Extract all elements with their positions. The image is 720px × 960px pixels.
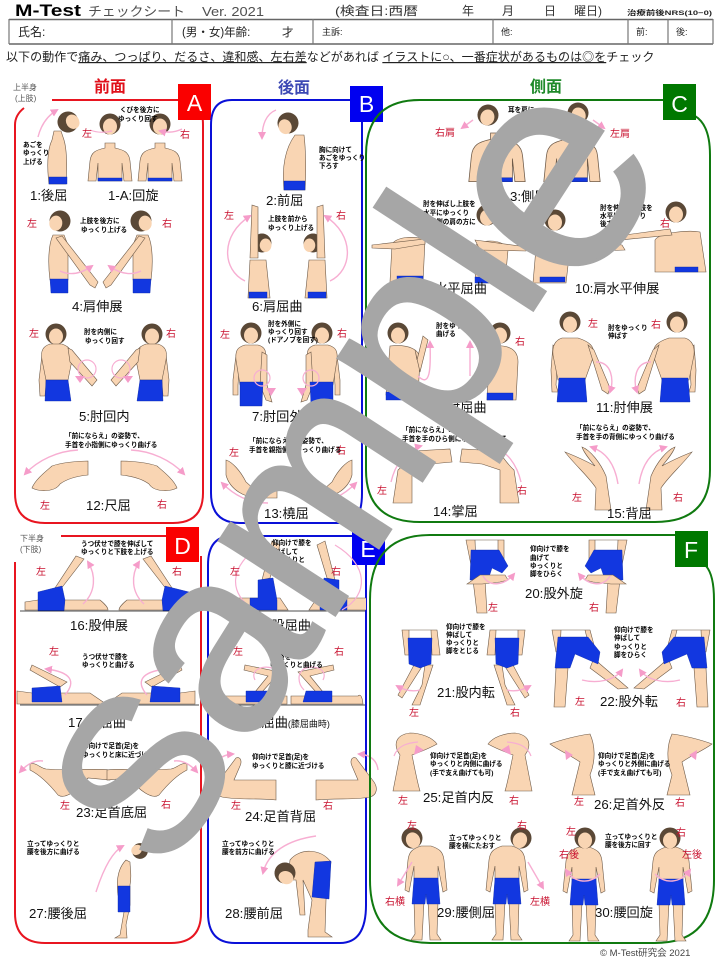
badge F — [675, 531, 708, 567]
exercise 23: 23:足首底屈 — [76, 805, 147, 820]
exercise 21: 左 — [409, 706, 419, 719]
exercise 10: 水平にゆっくり — [600, 211, 646, 220]
exercise 6 — [224, 205, 347, 314]
exercise 10: 肘を伸ばし上肢を — [600, 203, 653, 212]
exercise 1: 上げる — [23, 157, 43, 166]
exercise 14: 左 — [377, 484, 387, 497]
exercise 7 — [220, 319, 347, 424]
heading: front: 前面 — [94, 77, 126, 96]
exercise 13: 手首を親指側にゆっくり曲げる — [249, 445, 341, 454]
exercise 10: 後方に引く — [600, 219, 633, 228]
exercise 1: 1:後屈 — [30, 188, 67, 203]
exercise 26 — [550, 734, 712, 812]
exercise 1-A: 右 — [180, 128, 190, 141]
exercise 5: 肘を内側に — [84, 327, 117, 336]
exercise 12: 手首を小指側にゆっくり曲げる — [65, 440, 157, 449]
exercise 21 — [397, 622, 530, 719]
exercise 9: 水平にゆっくり — [423, 208, 469, 217]
exercise 30 — [559, 825, 702, 941]
exercise 18: ゆっくりと — [272, 555, 305, 564]
exercise 7: (ドアノブを回す) — [268, 335, 318, 344]
exercise 25: 右 — [509, 794, 519, 807]
frame F — [370, 535, 714, 943]
exercise 19: 19:股屈曲(膝屈曲時) — [230, 715, 330, 730]
section label: lower body — [20, 533, 44, 554]
exercise 22: 左 — [575, 695, 585, 708]
exercise 29: 左横 — [530, 895, 550, 908]
exercise 21: 右 — [510, 706, 520, 719]
section label: upper body — [13, 82, 37, 103]
exercise 11: 伸ばす — [608, 331, 628, 340]
exercise 15: 左 — [572, 491, 582, 504]
exercise 6: 右 — [336, 209, 346, 222]
exercise 20 — [466, 540, 627, 614]
panel D — [15, 527, 202, 943]
exercise 7: 肘を外側に — [268, 319, 301, 328]
exercise 22 — [552, 625, 710, 709]
patient table: 才 — [282, 25, 294, 39]
exercise 17 — [17, 645, 199, 730]
exercise 21: ゆっくりと — [446, 638, 479, 647]
exercise 17: 17:膝屈曲 — [68, 715, 126, 730]
exercise 23: 右 — [161, 798, 171, 811]
exercise 5: ゆっくり回す — [85, 336, 125, 345]
exercise 27 — [27, 839, 151, 938]
exercise 10 — [533, 202, 706, 296]
exercise 28: 腰を前方に曲げる — [222, 847, 275, 856]
panel C — [366, 84, 710, 522]
exercise 24: 24:足首背屈 — [245, 809, 316, 824]
title: チェックシート — [88, 4, 185, 19]
exercise 8: 右 — [515, 335, 525, 348]
exercise 24: ゆっくりと膝に近づける — [252, 761, 325, 770]
exercise 25: ゆっくりと内側に曲げる — [430, 759, 503, 768]
exercise 3: 3:側屈 — [510, 189, 547, 204]
badge D: D — [174, 533, 191, 559]
exam date: (検査日:西暦 — [335, 4, 418, 18]
exercise 23 — [20, 741, 197, 820]
exercise 12: 右 — [157, 498, 167, 511]
exercise 22: 伸ばして — [614, 633, 640, 642]
exercise 13: 「前にならえ」の姿勢で、 — [249, 436, 328, 445]
exercise 26: 左 — [574, 795, 584, 808]
exercise 28: 28:腰前屈 — [225, 905, 283, 921]
section label: upper body: 上半身 — [13, 82, 37, 92]
exercise 20: 仰向けで膝を — [530, 544, 570, 553]
exercise 15: 15:背屈 — [607, 506, 652, 521]
exercise 5: 5:肘回内 — [79, 409, 130, 424]
exercise 3: 右肩 — [435, 126, 455, 139]
exam date: 年 — [462, 4, 474, 18]
exercise 2: 胸に向けて — [319, 145, 352, 154]
exercise 9: 反対側の肩の方に — [423, 217, 476, 226]
exercise 19: ゆっくりと曲げる — [270, 660, 323, 669]
exercise 8: 肘をゆっくり — [436, 321, 476, 330]
title: Ver. 2021 — [202, 5, 264, 19]
exercise 28 — [222, 836, 332, 937]
exercise 19: 左 — [233, 645, 243, 658]
badge E — [352, 530, 385, 565]
badge C: C — [671, 91, 688, 117]
exercise 25: 左 — [398, 794, 408, 807]
exercise 1: あごを — [23, 140, 43, 149]
exercise 4: 4:肩伸展 — [72, 299, 123, 314]
exercise 2: 2:前屈 — [266, 192, 303, 208]
exercise 20: 右 — [589, 601, 599, 614]
exercise 15: 手首を手の背側にゆっくり曲げる — [576, 432, 675, 441]
exercise 22: 右 — [676, 696, 686, 709]
badge C — [663, 84, 696, 120]
exercise 15: 右 — [673, 491, 683, 504]
badge B: B — [359, 91, 374, 117]
patient table: 前: — [636, 26, 648, 37]
exercise 4: 右 — [162, 217, 172, 230]
badge D — [166, 527, 199, 562]
exercise 24 — [214, 752, 378, 824]
patient table: 後: — [676, 26, 688, 37]
badge A: A — [187, 90, 203, 116]
exercise 30: 立ってゆっくりと — [605, 832, 657, 841]
exercise 23: 仰向けで足首(足)を — [82, 741, 139, 750]
exercise 4 — [27, 210, 172, 314]
frame E — [208, 536, 366, 943]
exercise 20: 曲げて — [530, 553, 550, 562]
exercise 30: 右 — [676, 826, 686, 839]
patient table: 氏名: — [18, 24, 45, 39]
exercise 1: ゆっくり — [23, 148, 49, 157]
exercise 16: 16:股伸展 — [70, 618, 128, 633]
badge B — [350, 86, 383, 122]
exercise 19: 膝を — [278, 652, 291, 661]
heading: back: 後面 — [278, 78, 310, 97]
watermark: Sample: S — [0, 646, 285, 903]
exercise 22: 脚をひらく — [614, 650, 647, 659]
exercise 29 — [385, 819, 550, 940]
title — [15, 2, 264, 20]
exercise 1-A: 左 — [82, 127, 92, 140]
patient table — [9, 19, 713, 44]
section label: lower body: (下肢) — [20, 544, 42, 554]
exercise 24: 右 — [323, 799, 333, 812]
exercise 25: 25:足首内反 — [423, 790, 494, 805]
exercise 1 — [23, 107, 83, 203]
frame C — [366, 100, 710, 522]
exercise 23: 左 — [60, 799, 70, 812]
exercise 24: 仰向けで足首(足)を — [252, 752, 309, 761]
exercise 6: 6:肩屈曲 — [252, 299, 303, 314]
exercise 9: 9:肩水平屈曲 — [410, 281, 487, 296]
exercise 3 — [435, 100, 630, 204]
exercise 5: 右 — [166, 327, 176, 340]
copyright: © M-Test研究会 2021 — [600, 947, 690, 959]
exercise 20: 脚をひらく — [530, 569, 563, 578]
watermark: Sample: ampl — [47, 148, 603, 784]
NRS note: 治療前後NRS(10−0) — [627, 8, 712, 17]
exercise 18: 伸ばして — [272, 547, 298, 556]
frame D — [15, 536, 201, 943]
patient table: (男・女)年齢: — [182, 25, 250, 39]
exercise 21: 仰向けで膝を — [446, 622, 486, 631]
instruction line: 以下の動作で痛み、つっぱり、だるさ、違和感、左右差などがあれば イラストに○、一番症状があるものは◎をチェック — [6, 49, 654, 64]
exercise 16: うつ伏せで膝を伸ばして — [81, 539, 153, 548]
exercise 14: 14:掌屈 — [433, 504, 478, 519]
exercise 26: (手で支え曲げても可) — [598, 768, 661, 777]
badge E: E — [360, 536, 376, 562]
exercise 14: 右 — [517, 484, 527, 497]
exercise 26: 仰向けで足首(足)を — [598, 751, 655, 760]
exercise 11 — [551, 312, 696, 415]
exercise 14: 手首を手のひら側にゆっくり曲げる — [402, 434, 508, 443]
exercise 29: 29:腰側屈 — [437, 905, 495, 920]
exercise 29: 左 — [407, 819, 417, 832]
exercise 20: 20:股外旋 — [525, 586, 583, 601]
exercise 22: 仰向けで膝を — [614, 625, 654, 634]
exercise 7: 左 — [220, 328, 230, 341]
exercise 3: 耳を肩に — [508, 106, 534, 114]
exercise 17: ゆっくりと曲げる — [82, 660, 135, 669]
exercise 13: 13:橈屈 — [264, 506, 309, 521]
exercise 5: 左 — [29, 327, 39, 340]
exercise 14 — [377, 425, 527, 519]
exercise 18: 18:股屈曲 — [253, 618, 311, 633]
panel E — [208, 530, 389, 943]
panel F — [370, 531, 714, 943]
exercise 9: 引く — [423, 226, 436, 234]
exam date: 月 — [502, 4, 514, 18]
exercise 9: 肘を伸ばし上肢を — [423, 199, 476, 208]
exercise 17: うつ伏せで膝を — [82, 652, 128, 661]
patient table: 主訴: — [322, 26, 343, 37]
exercise 26: ゆっくりと外側に曲げる — [598, 759, 671, 768]
exercise 25: (手で支え曲げても可) — [430, 768, 493, 777]
exercise 20: 左 — [488, 601, 498, 614]
exercise 15 — [565, 423, 692, 521]
exercise 12: 12:尺屈 — [86, 498, 131, 513]
exercise 26: 右 — [675, 796, 685, 809]
section label: upper body: (上肢) — [15, 93, 37, 103]
exam date — [335, 4, 602, 18]
exercise 11: 右 — [651, 318, 661, 331]
exercise 30: 30:腰回旋 — [595, 905, 653, 920]
exercise 8: 曲げる — [436, 329, 456, 338]
exercise 29: 腰を横にたおす — [449, 841, 496, 850]
exercise 4: 左 — [27, 217, 37, 230]
exercise 14: 「前にならえ」の姿勢で、 — [402, 425, 481, 434]
exercise 30: 右後 — [559, 848, 579, 861]
exercise 18: 左 — [230, 565, 240, 578]
exercise 18: 上げる — [272, 563, 292, 572]
exercise 12: 「前にならえ」の姿勢で、 — [65, 431, 144, 440]
exercise 1-A — [82, 105, 190, 203]
exercise 13: 左 — [229, 446, 239, 459]
exercise 10: 10:肩水平伸展 — [575, 281, 659, 296]
exercise 27: 27:腰後屈 — [29, 906, 87, 921]
exercise 30: 左 — [566, 825, 576, 838]
panel A — [15, 84, 211, 523]
exercise 9 — [372, 199, 527, 296]
exercise 13: 右 — [336, 444, 346, 457]
exercise 20: ゆっくりと — [530, 561, 563, 570]
exercise 22: ゆっくりと — [614, 642, 647, 651]
exercise 7: 7:肘回外 — [252, 409, 303, 424]
exercise 22: 22:股外転 — [600, 694, 658, 709]
exercise 2: 下ろす — [319, 162, 339, 170]
exercise 2 — [262, 110, 365, 208]
exercise 21: 脚をとじる — [446, 646, 479, 655]
exercise 19 — [208, 645, 365, 730]
exercise 27: 立ってゆっくりと — [27, 839, 79, 848]
exercise 29: 立ってゆっくりと — [449, 833, 501, 842]
exercise 12 — [25, 431, 184, 513]
exercise 16: 右 — [172, 565, 182, 578]
exercise 27: 腰を後方に曲げる — [27, 847, 80, 856]
exercise 17: 左 — [49, 645, 59, 658]
patient table: 他: — [501, 26, 513, 37]
watermark: Sample: e — [353, 12, 720, 335]
exercise 19: 右 — [334, 645, 344, 658]
exercise 1-A: 1-A:回旋 — [108, 188, 159, 203]
exercise 11: 11:肘伸展 — [596, 400, 653, 415]
exercise 8: 8:肘屈曲 — [436, 400, 487, 415]
heading: side: 側面 — [530, 78, 562, 96]
exercise 1-A: ゆっくり回す — [118, 114, 158, 123]
exercise 7: ゆっくり回す — [268, 327, 308, 336]
exercise 15: 「前にならえ」の姿勢で、 — [576, 423, 655, 432]
exercise 16 — [20, 539, 202, 633]
exam date: 曜日) — [574, 4, 602, 18]
badge A — [178, 84, 211, 120]
exercise 25: 仰向けで足首(足)を — [430, 751, 487, 760]
exercise 12: 左 — [40, 499, 50, 512]
exercise 4: ゆっくり上げる — [81, 225, 127, 234]
exercise 10: 右 — [660, 217, 670, 230]
exercise 24: 左 — [231, 799, 241, 812]
exercise 16: ゆっくりと下肢を上げる — [81, 547, 154, 556]
frame B — [211, 100, 362, 523]
exercise 25 — [393, 733, 532, 807]
exercise 4: 上肢を後方に — [80, 216, 120, 225]
exercise 11: 肘をゆっくり — [608, 323, 648, 332]
exercise 11: 左 — [588, 317, 598, 330]
exercise 18: 右 — [331, 565, 341, 578]
exercise 23: ゆっくりと床に近づける — [82, 750, 155, 759]
exercise 21: 伸ばして — [446, 630, 472, 639]
exercise 5 — [29, 324, 176, 424]
exercise 30: 腰を後方に回す — [605, 840, 652, 849]
exercise 30: 左後 — [682, 848, 702, 861]
exam date: 日 — [544, 4, 556, 18]
exercise 6: 左 — [224, 209, 234, 222]
exercise 16: 左 — [36, 565, 46, 578]
exercise 3: 左肩 — [610, 127, 630, 140]
frame A — [15, 100, 203, 523]
exercise 13 — [222, 436, 356, 521]
exercise 6: ゆっくり上げる — [268, 223, 314, 232]
exercise 7: 右 — [337, 327, 347, 340]
exercise 21: 21:股内転 — [437, 685, 495, 700]
exercise 26: 26:足首外反 — [594, 797, 665, 812]
title: M-Test — [15, 2, 82, 20]
badge F: F — [684, 537, 698, 563]
exercise 28: 立ってゆっくりと — [222, 839, 274, 848]
exercise 6: 上肢を前から — [268, 214, 308, 223]
exercise 2: あごをゆっくり — [319, 153, 365, 162]
section label: lower body: 下半身 — [20, 533, 44, 543]
exercise 8 — [386, 321, 525, 415]
exercise 18: 仰向けで膝を — [272, 538, 312, 547]
exercise 18 — [208, 539, 366, 632]
exercise 29: 右横 — [385, 895, 405, 908]
exercise 29: 右 — [517, 819, 527, 832]
panel B — [211, 86, 383, 523]
exercise 1-A: くびを後方に — [120, 105, 160, 114]
